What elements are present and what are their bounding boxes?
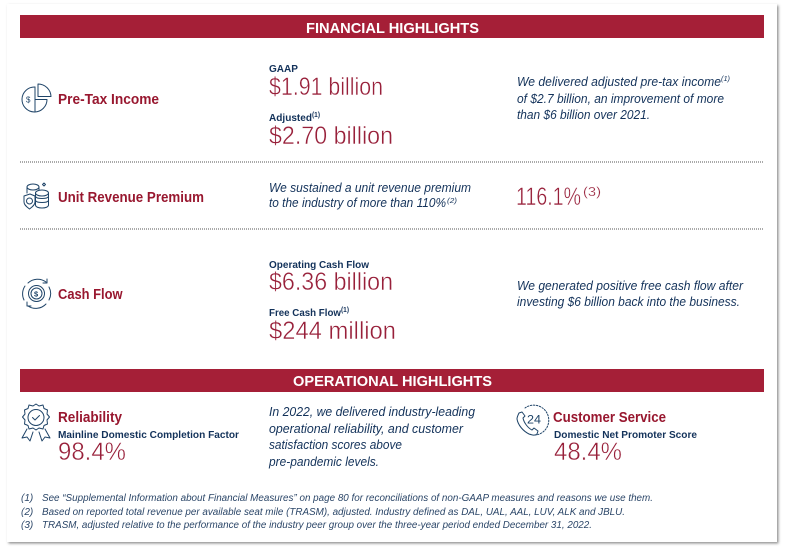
text: cash flow description (517, 279, 744, 309)
text: footnotes (21, 493, 653, 531)
text: operational description (268, 405, 475, 469)
figure: free cash flow: $244 million (269, 317, 396, 345)
icon: 24 hour phone (517, 405, 549, 435)
figure: adjusted (269, 112, 393, 150)
label: net promoter score: Domestic Net Promoter Score (554, 429, 697, 441)
heading: operational highlights: OPERATIONAL HIGHLIGHTS (293, 373, 492, 390)
text: unit revenue description: to the industry of more than 110% (269, 196, 446, 210)
figure: operating cash flow: $6.36 billion (269, 268, 393, 296)
text: operational description: operational reliability, and customer (269, 422, 464, 436)
panel: reliability (22, 404, 239, 466)
figure: free cash flow: Free Cash Flow (269, 307, 342, 319)
text: pre-tax description: (1) (721, 76, 730, 83)
text: pre-tax description: than $6 billion over 2021. (517, 108, 650, 122)
heading: financial highlights (20, 15, 764, 38)
panel: unit revenue premium (24, 181, 601, 211)
text: cash flow description: investing $6 billion back into the business. (517, 295, 740, 309)
label: customer service: Customer Service (553, 410, 666, 426)
figure: adjusted: (1) (312, 112, 320, 119)
text: footnotes: Based on reported total revenue per available seat mile (TRASM), adjusted. Industry defined as DAL, UAL, AAL, LUV, ALK and JBLU. (42, 507, 625, 518)
icon: coins and shield (24, 183, 48, 209)
icon: 24 hour phone: 24 (527, 414, 542, 426)
figure: GAAP: GAAP (269, 63, 298, 75)
text: footnotes: See “Supplemental Information about Financial Measures” on page 80 for reconciliations of non-GAAP measures and reasons we use them. (42, 493, 653, 504)
text: cash flow description: We generated positive free cash flow after (517, 279, 744, 293)
text: unit revenue description: (2) (447, 198, 457, 205)
figure: 48.4%: 48.4% (554, 438, 622, 466)
text: pre-tax description: We delivered adjusted pre-tax income (517, 75, 721, 89)
text: pre-tax description (517, 75, 730, 122)
panel: customer service (517, 405, 697, 466)
figure: adjusted: Adjusted (269, 112, 312, 124)
text: pre-tax description: of $2.7 billion, an improvement of more (517, 92, 724, 106)
icon: pie chart with dollar (22, 84, 51, 112)
panel: cash flow (23, 259, 744, 345)
figure: 98.4%: 98.4% (58, 438, 126, 466)
label: pre-tax income: Pre-Tax Income (58, 92, 159, 108)
label: cash flow: Cash Flow (58, 287, 123, 303)
text: unit revenue description (269, 181, 471, 210)
figure: free cash flow: (1) (341, 307, 349, 314)
label: reliability: Reliability (58, 410, 122, 426)
text: footnotes: (2) (21, 507, 33, 518)
icon: award ribbon (22, 404, 50, 441)
text: operational description: In 2022, we delivered industry-leading (269, 405, 475, 419)
panel: pre-tax income (22, 63, 730, 150)
figure: 116.1%: (3) (583, 184, 601, 199)
icon: pie chart with dollar: $ (26, 96, 31, 104)
heading: financial highlights: FINANCIAL HIGHLIGHTS (306, 20, 479, 37)
figure: adjusted: $2.70 billion (269, 122, 393, 150)
icon: circular dollar arrows (23, 279, 51, 308)
text: operational description: satisfaction scores above (269, 438, 402, 452)
text: operational description: pre-pandemic levels. (268, 455, 379, 469)
figure: operating cash flow: Operating Cash Flow (269, 259, 370, 271)
figure: GAAP: $1.91 billion (269, 73, 383, 101)
text: footnotes: (1) (21, 493, 33, 504)
icon: circular dollar arrows: $ (34, 290, 39, 298)
text: unit revenue description: We sustained a unit revenue premium (269, 181, 471, 195)
label: unit revenue premium: Unit Revenue Premium (58, 190, 204, 206)
text: footnotes: (3) (21, 520, 33, 531)
text: footnotes: TRASM, adjusted relative to the performance of the industry peer group over the three-year period ended December 31, 2022. (42, 520, 592, 531)
figure: 116.1%: 116.1% (516, 183, 581, 211)
figure: GAAP (269, 63, 383, 101)
heading: operational highlights (20, 369, 764, 392)
label: completion factor: Mainline Domestic Completion Factor (58, 429, 239, 441)
